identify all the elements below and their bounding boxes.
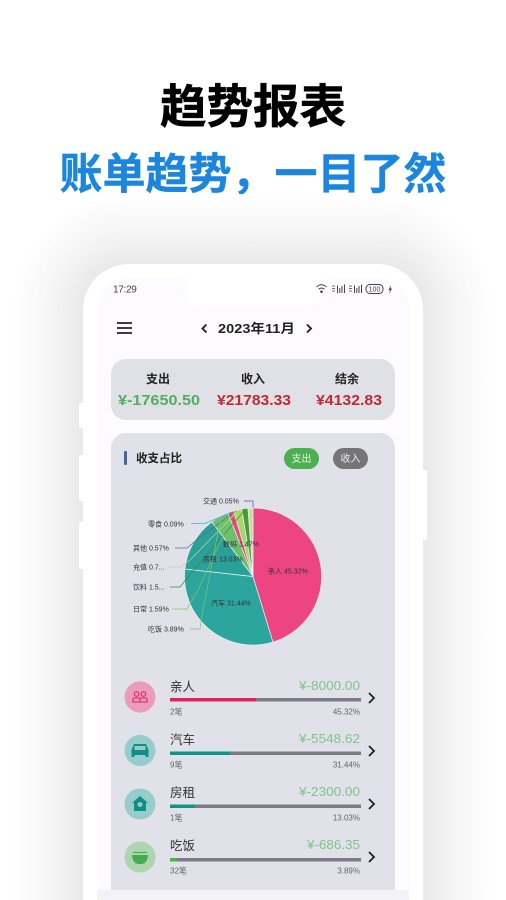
expense summary: ¥-17650.50 [118, 393, 200, 409]
icon: people [124, 682, 156, 712]
row: 房租: 房租 [170, 785, 195, 800]
toggle: income: 收入 [340, 452, 360, 465]
icon: car [124, 735, 156, 766]
toggle: expense [284, 448, 319, 469]
menu icon [117, 323, 132, 333]
row: 亲人: 亲人 [170, 680, 196, 694]
icon: house [124, 788, 156, 820]
income summary: 收入 [241, 371, 265, 386]
month selector: 2023年11月 [218, 321, 295, 336]
notch [188, 276, 322, 305]
slice labels: 交通 0.05% [203, 496, 239, 506]
row: 吃饭 [124, 838, 374, 876]
row: 吃饭: 32笔 [170, 866, 187, 876]
screen [97, 278, 409, 900]
row: 汽车: 9笔 [170, 760, 182, 770]
row: 汽车: ¥-5548.62 [298, 732, 360, 746]
row: 汽车 [124, 732, 374, 770]
row: 亲人: 2笔 [170, 706, 182, 716]
pie chart [133, 496, 322, 645]
balance summary: 结余 [335, 371, 359, 386]
toggle: income [333, 448, 368, 469]
row: 亲人: 45.32% [333, 708, 360, 716]
row: 吃饭: ¥-686.35 [306, 838, 360, 852]
slice labels: 吃饭 3.89% [148, 624, 184, 634]
balance summary [316, 371, 382, 409]
row: 吃饭: 吃饭 [170, 839, 196, 853]
status bar time: 17:29 [113, 284, 137, 296]
title: 趋势报表 [160, 81, 346, 133]
row: 房租 [124, 785, 374, 822]
panel heading [124, 451, 182, 465]
phone shadow [13, 194, 493, 900]
slice labels: 房租 13.03% [203, 554, 243, 564]
row: 房租: ¥-2300.00 [298, 785, 360, 799]
slice labels: 亲人 45.32% [268, 566, 308, 576]
slice labels [133, 496, 308, 634]
toggle: expense: 支出 [292, 452, 312, 465]
slice labels: 其他 0.57% [133, 544, 169, 552]
month selector [202, 321, 311, 336]
slice labels: 零食 0.09% [148, 520, 184, 528]
leader lines [168, 501, 253, 629]
status bar icons [316, 284, 392, 294]
icon: bowl [124, 842, 156, 872]
row: 房租: 1笔 [170, 812, 182, 822]
balance summary: ¥4132.83 [316, 393, 382, 409]
row: 汽车: 31.44% [333, 760, 360, 770]
row: 房租: 13.03% [333, 814, 360, 822]
slice labels: 汽车 31.44% [211, 598, 251, 608]
row: 亲人: ¥-8000.00 [298, 679, 360, 693]
panel heading: 收支占比 [136, 451, 182, 465]
income summary [217, 371, 291, 409]
slice labels: 充值 0.7... [133, 562, 165, 572]
screen bottom strip [97, 890, 409, 900]
panel: summary [111, 359, 395, 420]
expense summary [118, 371, 200, 409]
slice labels: 日常 1.59% [133, 604, 169, 614]
row: 吃饭: 3.89% [337, 866, 360, 876]
phone body [83, 264, 423, 900]
side buttons [79, 403, 427, 569]
subtitle: 账单趋势，一目了然 [60, 151, 446, 199]
slice labels: 饮料 1.5... [133, 582, 165, 592]
panel: share breakdown [111, 433, 395, 890]
row: 汽车: 汽车 [170, 732, 195, 747]
battery level: 100 [369, 286, 380, 294]
slice labels: 数码 1.47% [223, 540, 259, 548]
phone mockup [79, 264, 427, 900]
row: 亲人 [124, 679, 374, 716]
expense summary: 支出 [146, 371, 170, 386]
income summary: ¥21783.33 [217, 393, 291, 409]
